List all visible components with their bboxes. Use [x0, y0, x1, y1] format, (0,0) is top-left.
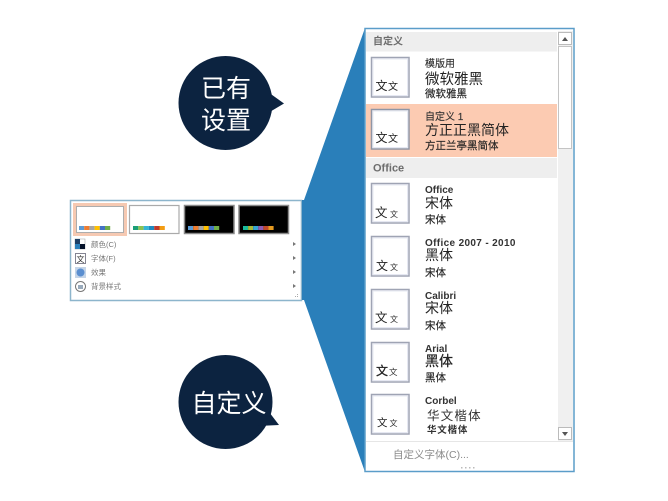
font item: Office 2007 - 2010: 宋体 — [425, 266, 446, 279]
font item: Calibri: 宋体 — [425, 319, 446, 332]
custom fonts link: 自定义字体(C)... — [393, 448, 469, 461]
black theme thumbnail alternate — [239, 206, 288, 234]
section header: custom — [366, 32, 557, 52]
section header: Office: Office — [373, 162, 404, 174]
speech bubble: existing settings: 设置 — [201, 107, 251, 135]
font item: Arial: Arial — [425, 344, 447, 355]
font item: Corbel: 华文楷体 — [427, 424, 468, 436]
speech bubble: existing settings — [178, 56, 284, 150]
menu label: effects: 效果 — [91, 267, 106, 277]
black theme thumbnail — [184, 206, 234, 234]
font item: Corbel — [372, 394, 482, 436]
font item: Calibri — [372, 290, 456, 332]
font item: custom 1 highlighted: 文 — [388, 132, 398, 145]
font item: template: 微软雅黑 — [425, 71, 483, 88]
divider above custom fonts — [366, 441, 573, 442]
speech bubble: custom — [178, 355, 279, 449]
font item: Calibri: Calibri — [425, 291, 456, 302]
panel: font list dropdown — [365, 28, 574, 472]
font item: Corbel: 华文楷体 — [427, 408, 482, 423]
font item: Office 2007 - 2010: 文 — [376, 258, 388, 273]
font item: custom 1 highlighted — [366, 104, 557, 157]
font item: Calibri: 文 — [375, 310, 388, 325]
font item: Arial: 文 — [389, 367, 398, 377]
icon: colors — [75, 239, 85, 249]
icon: effects — [75, 267, 86, 278]
menu label: fonts: 字体(F) — [91, 253, 116, 263]
font item: Office 2007 - 2010: 文 — [390, 262, 398, 272]
resize handle dots — [461, 467, 474, 468]
font item: Corbel: 文 — [390, 418, 398, 428]
font item: template: 模版用 — [425, 57, 455, 70]
speech bubble: existing settings: 已有 — [201, 75, 251, 103]
menu label: background styles: 背景样式 — [91, 281, 121, 291]
font item: Office: 文 — [390, 209, 398, 219]
font item: Office: 文 — [375, 205, 388, 220]
menu label: colors: 颜色(C) — [91, 239, 117, 249]
font item: Corbel: 文 — [377, 416, 388, 429]
font item: Calibri: 文 — [390, 314, 398, 324]
section header: Office — [366, 158, 557, 178]
font item: custom 1 highlighted: 文 — [376, 130, 388, 145]
font item: template — [372, 57, 483, 100]
blue funnel connector — [302, 28, 365, 472]
section header: custom: 自定义 — [373, 34, 403, 48]
font item: Arial: 文 — [376, 363, 388, 378]
font item: Office — [372, 184, 454, 226]
icon: fonts: 文 — [76, 254, 84, 264]
font item: Corbel: Corbel — [425, 396, 457, 407]
font item: Calibri: 宋体 — [425, 300, 453, 316]
font item: Arial — [372, 342, 453, 384]
selected white theme thumbnail — [74, 204, 126, 234]
font item: template: 文 — [388, 80, 398, 93]
font item: custom 1 highlighted: 方正兰亭黑简体 — [425, 139, 499, 152]
white theme thumbnail — [130, 206, 179, 234]
font item: Office: 宋体 — [425, 213, 446, 226]
font item: custom 1 highlighted: 方正正黑简体 — [425, 122, 509, 138]
font item: Arial: 黑体 — [425, 353, 453, 369]
font item: Office: 宋体 — [425, 195, 453, 211]
font item: Arial: 黑体 — [425, 372, 446, 384]
font item: Office 2007 - 2010: Office 2007 - 2010 — [425, 238, 516, 249]
font item: custom 1 highlighted: 自定义 1 — [425, 110, 464, 123]
scrollbar — [558, 31, 573, 441]
speech bubble: custom: 自定义 — [191, 390, 267, 418]
font item: Office 2007 - 2010: 黑体 — [425, 247, 453, 263]
icon: fonts — [76, 254, 86, 264]
font item: Office: Office — [425, 185, 454, 196]
font item: Office 2007 - 2010 — [372, 236, 516, 279]
icon: background styles — [76, 282, 86, 292]
resize grip — [295, 294, 298, 297]
font item: template: 文 — [376, 78, 388, 93]
panel: theme variants menu — [70, 200, 302, 300]
font item: template: 微软雅黑 — [425, 87, 467, 100]
submenu arrows — [293, 242, 296, 288]
